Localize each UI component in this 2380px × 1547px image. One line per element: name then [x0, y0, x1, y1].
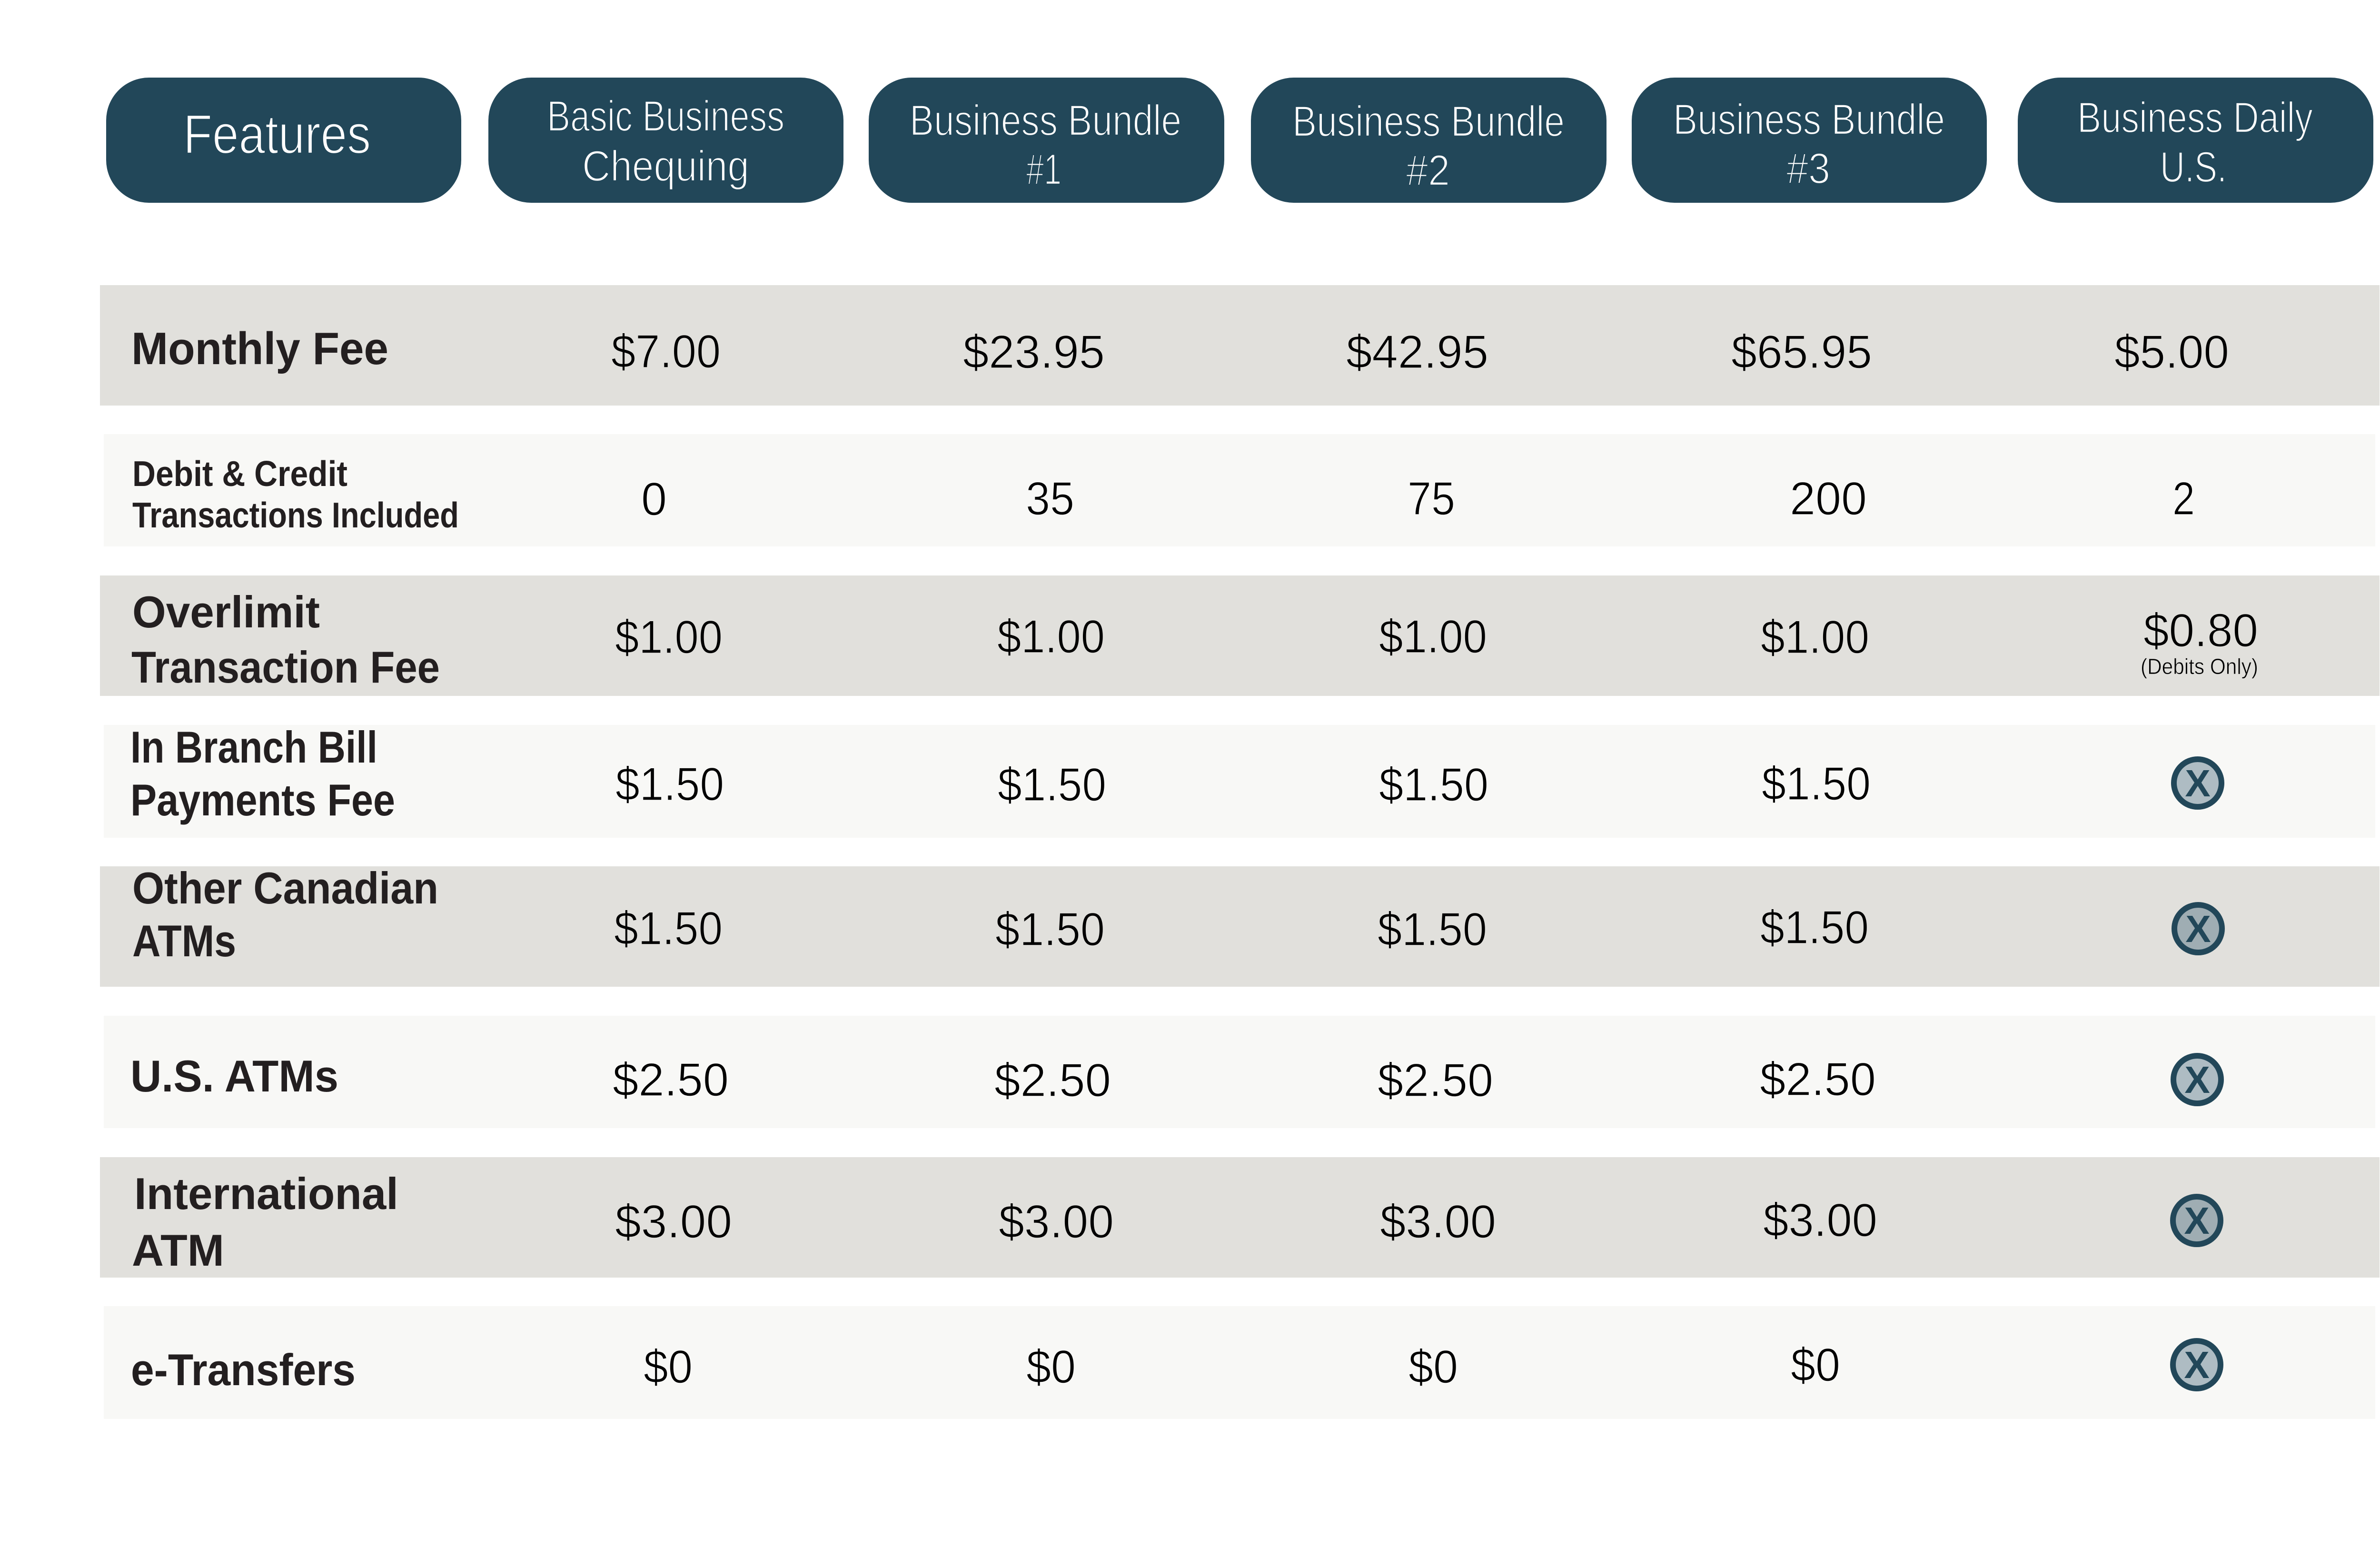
- row: Monthly Fee: Monthly Fee: [131, 323, 388, 374]
- row: Other Canadian ATMs: ATMs: [132, 916, 236, 966]
- icon: not available: [2173, 1056, 2221, 1103]
- pill: Business Bundle #1: #1: [1026, 146, 1061, 194]
- row: e-Transfers: $0: [1026, 1340, 1076, 1393]
- row: Overlimit Transaction Fee: Transaction Fee: [131, 642, 440, 692]
- icon: not available: X: [2184, 1200, 2210, 1242]
- row: International ATM: $3.00: [999, 1195, 1114, 1248]
- pill: Business Daily U.S.: Business Daily: [2077, 94, 2313, 142]
- row: In Branch Bill Payments Fee: Payments Fee: [130, 775, 395, 825]
- row: e-Transfers: [104, 1306, 2375, 1419]
- row: In Branch Bill Payments Fee: [104, 722, 2375, 838]
- row: Other Canadian ATMs: [100, 863, 2380, 987]
- row: U.S. ATMs: [104, 1016, 2375, 1128]
- pill: Business Bundle #3: [1632, 78, 1987, 203]
- row: Other Canadian ATMs: $1.50: [1378, 903, 1487, 955]
- row: Overlimit Transaction Fee: $1.00: [997, 610, 1105, 663]
- row: Debit & Credit Transactions Included: 35: [1026, 472, 1074, 525]
- pill: Basic Business Chequing: Basic Business: [547, 92, 784, 140]
- pill: Features: Features: [183, 103, 371, 165]
- row: International ATM: $3.00: [1763, 1194, 1877, 1246]
- row: Debit & Credit Transactions Included: 2: [2172, 472, 2195, 525]
- pill: Business Bundle #2: Business Bundle: [1292, 98, 1565, 146]
- row: Overlimit Transaction Fee: $0.80: [2143, 604, 2258, 656]
- pill: Business Bundle #2: [1251, 78, 1606, 203]
- row: In Branch Bill Payments Fee: In Branch Bill: [130, 722, 377, 772]
- pill: Features: [106, 78, 461, 203]
- icon: not available: X: [2185, 762, 2211, 804]
- icon: not available: [2174, 905, 2222, 952]
- pill: Basic Business Chequing: Chequing: [582, 142, 749, 190]
- row: Monthly Fee: $5.00: [2114, 326, 2229, 378]
- row: International ATM: $3.00: [615, 1195, 732, 1248]
- row: Overlimit Transaction Fee: Overlimit: [132, 587, 320, 637]
- pill: Business Daily U.S.: U.S.: [2160, 143, 2227, 191]
- row: U.S. ATMs: $2.50: [1760, 1053, 1876, 1105]
- row: e-Transfers: $0: [1791, 1339, 1840, 1391]
- icon: not available: [2173, 1341, 2221, 1388]
- pill: Business Bundle #1: Business Bundle: [910, 97, 1181, 145]
- row: Monthly Fee: [100, 285, 2380, 406]
- row: Monthly Fee: $65.95: [1731, 326, 1872, 378]
- icon: not available: [2173, 1197, 2221, 1244]
- row: Debit & Credit Transactions Included: Debit & Credit: [132, 454, 347, 494]
- row: Monthly Fee: $7.00: [611, 325, 721, 377]
- pill: Business Bundle #3: Business Bundle: [1673, 96, 1945, 144]
- row: Debit & Credit Transactions Included: 200: [1790, 472, 1867, 525]
- row: U.S. ATMs: $2.50: [994, 1054, 1111, 1106]
- pill: Business Bundle #2: #2: [1406, 147, 1450, 195]
- icon: not available: X: [2184, 1059, 2210, 1101]
- row: International ATM: International: [134, 1169, 398, 1219]
- row: Monthly Fee: $23.95: [963, 326, 1105, 378]
- row: U.S. ATMs: $2.50: [1378, 1054, 1493, 1106]
- row: Monthly Fee: $42.95: [1346, 326, 1488, 378]
- icon: not available: X: [2184, 1344, 2210, 1386]
- row: International ATM: $3.00: [1380, 1195, 1496, 1248]
- pill: Business Bundle #3: #3: [1786, 145, 1830, 193]
- row: Debit & Credit Transactions Included: 0: [641, 473, 667, 525]
- row: Overlimit Transaction Fee: $1.00: [1379, 610, 1487, 663]
- row: U.S. ATMs: $2.50: [613, 1053, 729, 1106]
- icon: not available: [2174, 759, 2221, 807]
- pill: Business Bundle #1: [869, 78, 1224, 203]
- row: International ATM: [100, 1157, 2380, 1278]
- row: e-Transfers: $0: [1408, 1340, 1458, 1393]
- row: In Branch Bill Payments Fee: $1.50: [998, 758, 1106, 811]
- icon: not available: X: [2185, 908, 2211, 950]
- row: International ATM: ATM: [132, 1225, 224, 1275]
- row: Overlimit Transaction Fee: $1.00: [1761, 611, 1869, 663]
- row: Overlimit Transaction Fee: [100, 575, 2380, 696]
- row: e-Transfers: e-Transfers: [131, 1345, 356, 1395]
- row: In Branch Bill Payments Fee: $1.50: [615, 758, 724, 810]
- header: column pills: [106, 78, 2373, 203]
- row: U.S. ATMs: U.S. ATMs: [130, 1051, 338, 1101]
- row: Other Canadian ATMs: Other Canadian: [132, 863, 438, 913]
- row: In Branch Bill Payments Fee: $1.50: [1762, 757, 1871, 810]
- row: Other Canadian ATMs: $1.50: [995, 903, 1105, 955]
- row: Debit & Credit Transactions Included: [104, 434, 2375, 546]
- row: Debit & Credit Transactions Included: Transactions Included: [132, 495, 459, 535]
- row: Overlimit Transaction Fee: (Debits Only): [2141, 654, 2258, 679]
- row: e-Transfers: $0: [644, 1340, 693, 1393]
- row: Debit & Credit Transactions Included: 75: [1408, 472, 1455, 525]
- row: In Branch Bill Payments Fee: $1.50: [1379, 758, 1488, 811]
- pill: Business Daily U.S.: [2018, 78, 2373, 203]
- row: Overlimit Transaction Fee: $1.00: [615, 611, 723, 663]
- pill: Basic Business Chequing: [488, 78, 843, 203]
- row: Other Canadian ATMs: $1.50: [1760, 901, 1869, 953]
- row: Other Canadian ATMs: $1.50: [614, 902, 723, 954]
